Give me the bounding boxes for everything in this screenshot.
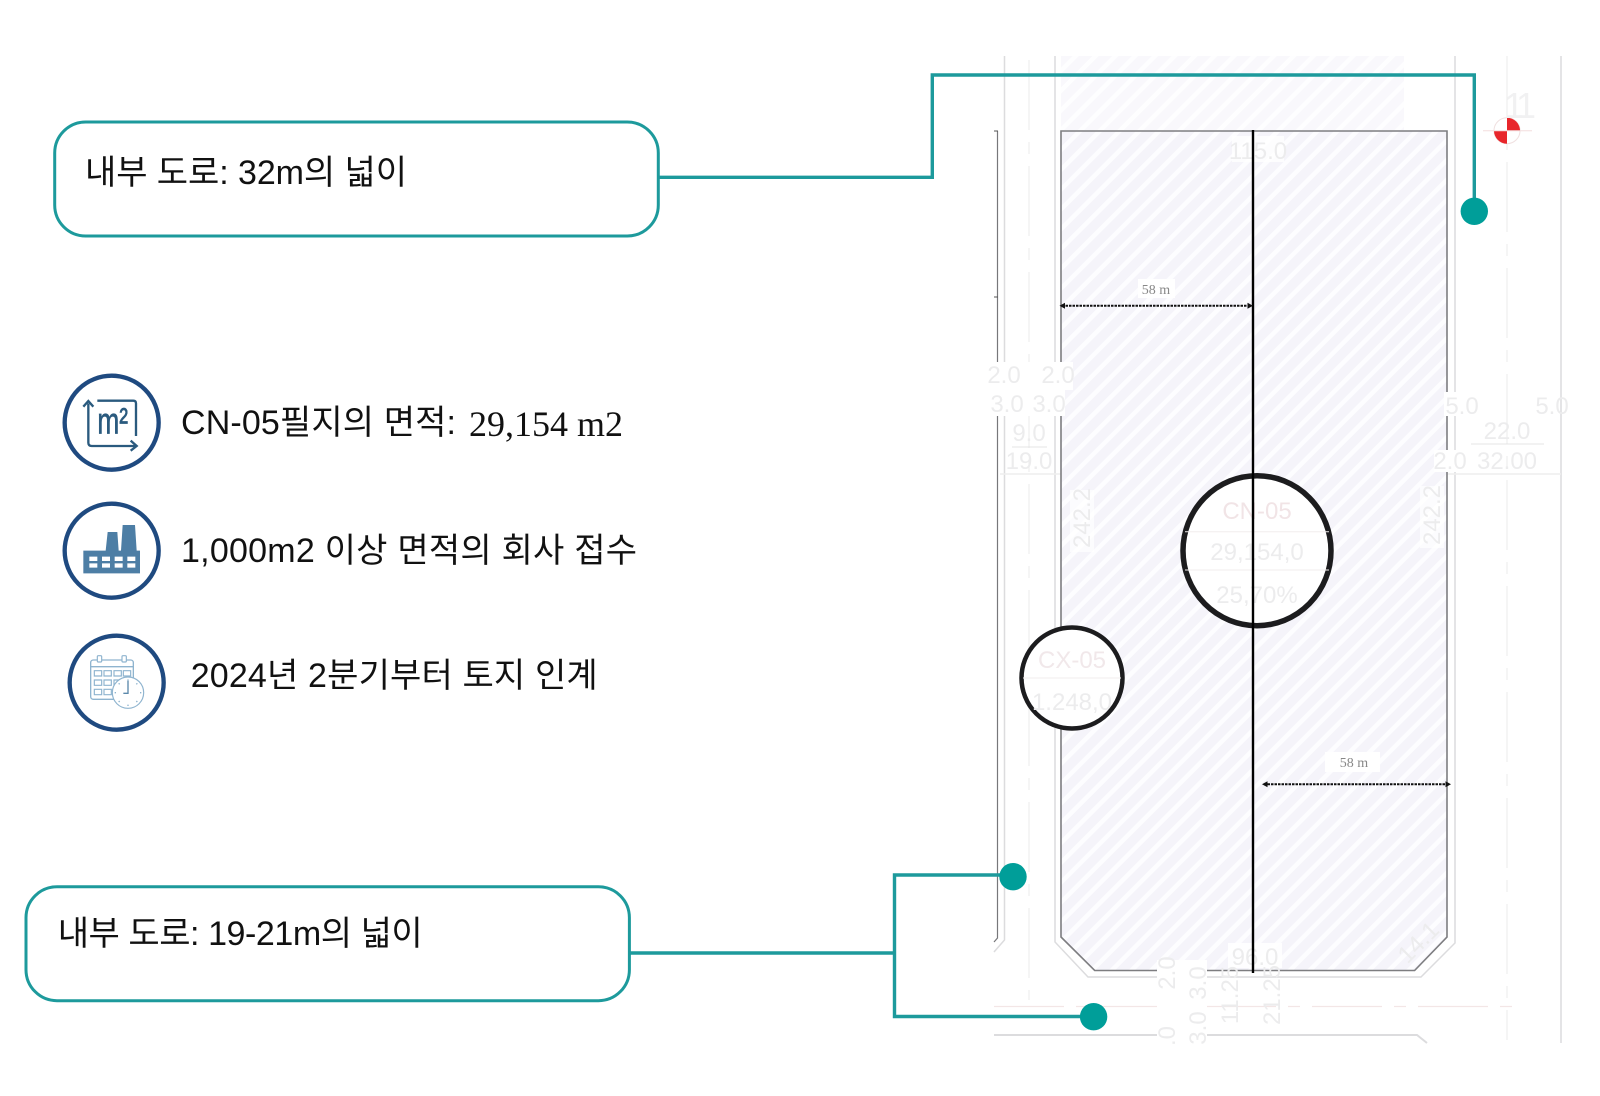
plot division line [1252,130,1254,973]
text: plot area label: CN-05필지의 면적: [181,404,456,442]
callout text: 내부 도로: 19-21m의 넓이 [58,915,423,953]
bottom road labels: .0 [1154,1026,1181,1046]
row: plot area [65,376,623,470]
connector dot upper [999,863,1027,890]
width arrow bottom [1262,752,1451,787]
plot label circle CN-05: 25,70% [1216,582,1298,609]
connector dot [1461,198,1488,225]
width arrow bottom: 58 m [1340,756,1368,771]
plot label circle CX-05: CX-05 [1038,647,1106,674]
plot label circle CN-05 [1183,476,1331,626]
bottom road labels: 11.25 [1217,966,1244,1024]
dimension labels on roads: 2.0 [987,362,1021,389]
red survey marker [1483,85,1536,144]
dimension labels on roads: 5.0 [1445,393,1479,420]
text: handover date: 2024년 2분기부터 토지 인계 [191,657,598,695]
bottom road labels: 2.0 [1154,956,1181,990]
dimension labels on roads: 22.0 [1484,418,1530,445]
dimension labels on roads: 2.0 [1433,448,1467,475]
width arrow top [1060,279,1253,309]
text: minimum area: 1,000m2 이상 면적의 회사 접수 [181,532,637,570]
row: land handover date [70,636,598,730]
row: minimum company area [65,504,637,598]
plot label circle CN-05: 29,154,0 [1210,539,1304,566]
bottom road labels: 3.0 [1185,1011,1212,1045]
dimension labels on roads: 3.0 [990,391,1024,418]
icon: calendar and clock [70,636,164,730]
site plan drawing [987,56,1569,1046]
dimension labels on roads: 32.00 [1477,448,1537,475]
dimension labels on roads: 19.0 [1006,448,1052,475]
callout box [55,122,658,236]
dimension labels on roads [987,362,1569,475]
road boundary lines [994,56,1561,1043]
icon: factory [65,504,159,598]
neighbouring hatched plot [1061,56,1404,130]
connector dot lower [1080,1003,1107,1030]
plot length labels [1069,136,1446,971]
text: plot area value: 29,154 m2 [469,404,623,444]
callout box [26,887,629,1001]
bottom road labels [1154,956,1286,1046]
connector: bottom callout to roads [630,863,1107,1030]
road centre lines [994,56,1512,1040]
plot length labels: 242.2 [1419,485,1446,545]
plot length labels: 96.0 [1232,944,1278,971]
plot label circle CN-05: CN-05 [1222,498,1292,525]
CN-05 plot hatched area [1061,131,1447,970]
dimension labels on roads: 5.0 [1535,393,1569,420]
callout: internal road 19-21m [26,887,629,1001]
plot length labels: 242.2 [1069,488,1096,548]
plot label circle CX-05: 1.248,0 [1032,689,1112,716]
left road edge [994,131,998,942]
icon: area m2: m² [97,399,128,441]
dimension labels on roads: 2.0 [1041,362,1075,389]
callout text: 내부 도로: 32m의 넓이 [85,154,407,192]
dimension labels on roads: 3.0 [1032,391,1066,418]
dimension labels on roads: 9.0 [1012,420,1046,447]
plot length labels: 115.0 [1229,138,1287,165]
red survey marker: 11 [1504,85,1536,126]
callout: internal road 32m [55,122,658,236]
dimension tick [994,131,998,297]
icon: area m2 [65,376,159,470]
plot label circle CX-05 [1022,628,1122,728]
bottom road labels: 3.0 [1185,966,1212,1000]
width arrow top: 58 m [1142,283,1170,298]
connector: top callout to road [658,75,1488,225]
bottom road labels: 21.25 [1259,965,1286,1025]
plot length labels: 14.1 [1393,917,1445,969]
